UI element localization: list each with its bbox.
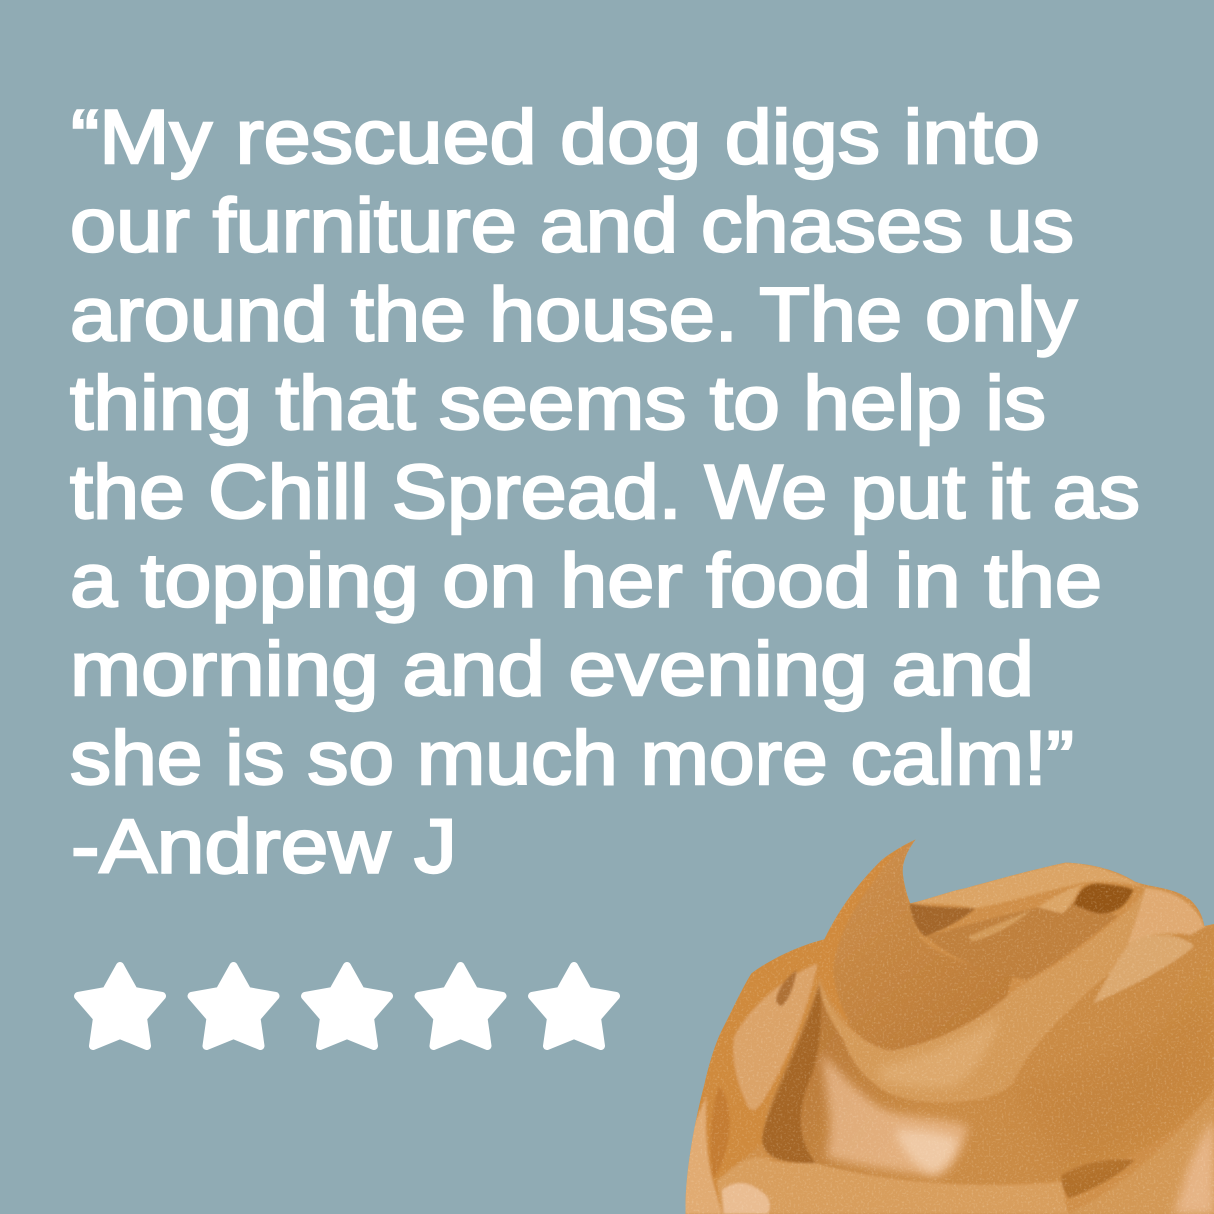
testimonial quote: “My rescued dog digs into: [71, 95, 1040, 180]
star 4: [418, 966, 502, 1046]
testimonial quote: thing that seems to help is: [70, 361, 1046, 446]
testimonial quote: the Chill Spread. We put it as: [70, 450, 1140, 535]
testimonial quote: -Andrew J: [71, 805, 457, 890]
outer left rim: [696, 936, 826, 1189]
dark crevices: [909, 903, 975, 937]
testimonial quote: [70, 95, 1140, 890]
peanut butter swirl: [670, 820, 1214, 1214]
shade: lower right: [1010, 1007, 1214, 1173]
testimonial quote: she is so much more calm!”: [70, 716, 1074, 801]
star 3: [305, 966, 389, 1046]
lower right fold: [1061, 1159, 1135, 1198]
right rim highlight: [1093, 935, 1194, 1003]
testimonial quote: our furniture and chases us: [70, 184, 1074, 269]
swirl crest band: [819, 887, 1204, 1102]
lower bowl: [765, 986, 898, 1170]
star 5: [532, 966, 616, 1046]
bottom rim: [717, 1157, 1069, 1214]
star 2: [192, 966, 276, 1046]
upper rim and ridge: [910, 863, 1145, 908]
testimonial quote: around the house. The only: [70, 272, 1077, 357]
five star rating: [78, 966, 616, 1046]
upper spike scoop: [824, 839, 1014, 1051]
dark bowl edge: [762, 987, 821, 1163]
sheen: crest glow: [878, 1017, 1000, 1088]
testimonial quote: a topping on her food in the: [70, 538, 1102, 624]
inner shelf: [927, 900, 1118, 980]
star 1: [78, 966, 162, 1046]
testimonial quote: morning and evening and: [70, 627, 1034, 712]
scoop rim: [820, 848, 902, 1019]
sheen: lower right fold: [1173, 1120, 1214, 1214]
grain: [670, 820, 1214, 1214]
sheen: left glossy area: [823, 1053, 968, 1177]
